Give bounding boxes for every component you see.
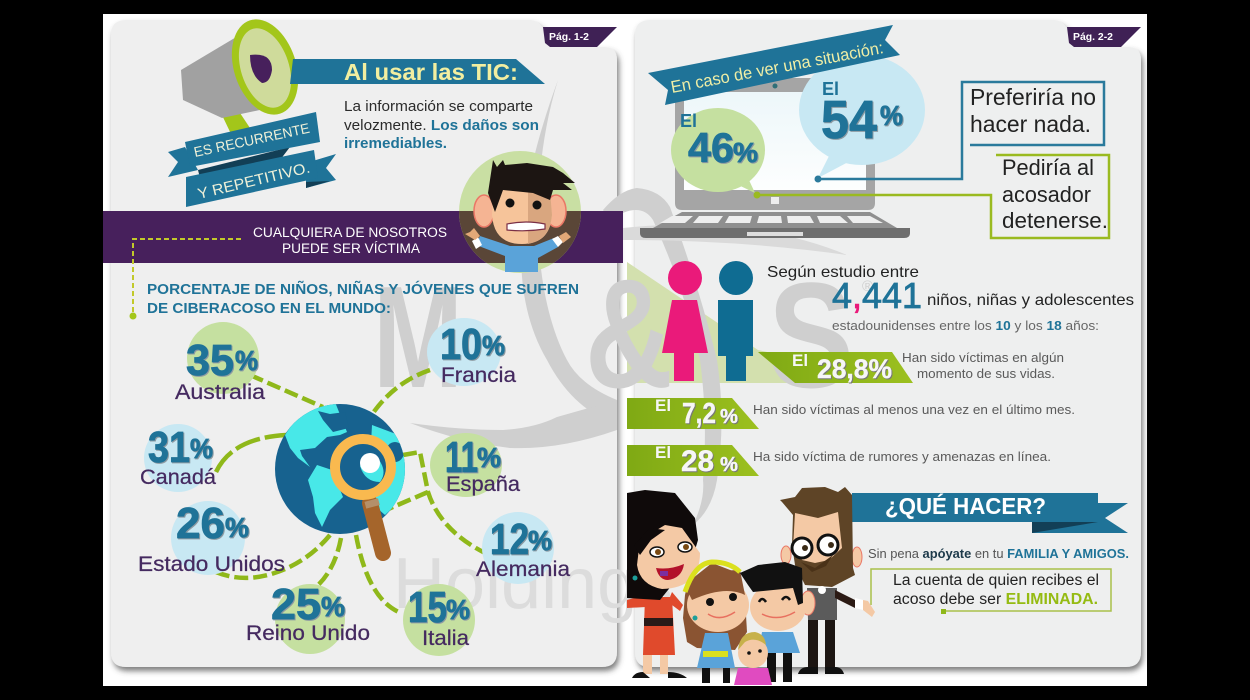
stat bar: 28,8%: Han sido víctimas en algún [902, 351, 1064, 365]
icon: girl figure [662, 261, 708, 381]
watermark: M&S Holdings: M [373, 256, 463, 418]
watermark: M&S Holdings: ® [862, 278, 873, 295]
stat bar: 28,8%: El [792, 351, 808, 370]
callout: ask the harasser to stop: detenerse. [1002, 208, 1108, 233]
watermark: M&S Holdings [373, 80, 873, 624]
speech bubble: 46%: El [680, 111, 697, 131]
stat bar: 28%: % [720, 454, 738, 476]
text block: information shared: irremediables. [344, 136, 447, 152]
stat bar: 7,2%: Han sido víctimas al menos una vez en el último mes. [753, 403, 1075, 417]
data point: Alemania 12% [476, 512, 570, 584]
watermark: M&S Holdings: Holdings [393, 544, 673, 624]
stat bar: 28,8%: momento de sus vidas. [917, 367, 1055, 381]
page tab: Pág. 2-2 [1067, 27, 1141, 47]
stat bar: 28,8%: 28,8% [817, 354, 892, 384]
illustration: man with glasses [780, 487, 875, 674]
text block: study of 4,441 children: 4,441 [832, 275, 922, 316]
callout: ask the harasser to stop: Pediría al [1002, 155, 1094, 180]
icon: globe with magnifier [275, 402, 412, 553]
callout: account must be deleted [871, 569, 1111, 614]
speech bubble: 54%: El [822, 79, 839, 99]
data point: Francia 10% [427, 318, 516, 387]
data point: Estados Unidos 26%: 26 [176, 499, 225, 548]
speech bubble: 54% [799, 55, 925, 178]
data point: Alemania 12%: Alemania [476, 558, 570, 581]
callout: account must be deleted: La cuenta de quien recibes el [893, 572, 1099, 589]
callout: prefer to do nothing: hacer nada. [970, 111, 1091, 137]
data point: Reino Unido 25%: 25 [271, 580, 321, 629]
ribbon: es recurrente y repetitivo [168, 112, 336, 207]
stat bar: 28%: El [655, 443, 671, 462]
data point: Estados Unidos 26%: Estado Unidos [138, 553, 285, 576]
data point: Francia 10%: 10 [440, 320, 482, 369]
page tab: Pág. 2-2: Pág. 2-2 [1073, 31, 1113, 43]
data point: España 11%: % [477, 442, 501, 473]
connector lines: countries to globe [216, 370, 485, 613]
illustration: boy in blue [740, 562, 815, 682]
data point: Australia 35%: 35 [186, 336, 234, 385]
ribbon: en caso de ver una situación: En caso de ver una situación: [669, 38, 885, 97]
callout: ask the harasser to stop: acosador [1002, 182, 1091, 207]
text block: information shared [344, 99, 539, 152]
data point: Estados Unidos 26%: % [225, 512, 249, 543]
data point: Italia 15% [403, 583, 475, 656]
data point: Reino Unido 25% [246, 580, 370, 654]
background shape: pale green wedge [627, 262, 912, 383]
data point: Alemania 12%: % [528, 525, 552, 556]
watermark: M&S Holdings: & [585, 247, 673, 420]
stat bar: 28%: 28 [681, 445, 714, 478]
text block: study of 4,441 children: Según estudio entre [767, 264, 919, 281]
stat bar: 7,2%: El [655, 396, 671, 415]
icon: megaphone [181, 11, 310, 136]
ribbon: qué hacer: ¿QUÉ HACER? [885, 492, 1046, 519]
page tab: Pág. 1-2 [543, 27, 617, 47]
data point: España 11%: España [446, 473, 520, 496]
data point: Canadá 31% [140, 423, 216, 492]
page tab: Pág. 1-2: Pág. 1-2 [549, 31, 589, 43]
icon: boy character [459, 151, 581, 273]
panel: right page background [635, 20, 1141, 667]
data point: Reino Unido 25%: % [321, 591, 345, 622]
data point: Alemania 12%: 12 [490, 515, 529, 564]
stat bar: 7,2% [627, 396, 1075, 430]
stat bar: 7,2%: 7,2 [682, 398, 716, 430]
ribbon: qué hacer [852, 492, 1128, 533]
text: seek family and friends: Sin pena apóyate en tu FAMILIA Y AMIGOS. [868, 547, 1129, 561]
icon: boy figure [718, 261, 753, 381]
watermark: M&S Holdings: S [768, 251, 854, 419]
data point: Canadá 31%: % [190, 433, 213, 464]
illustration: woman in red dress [627, 490, 700, 678]
banner: cualquiera de nosotros [103, 211, 623, 320]
data point: Estados Unidos 26% [138, 499, 285, 576]
data point: Italia 15%: 15 [408, 583, 447, 632]
icon: laptop [640, 78, 910, 238]
speech bubble: 46%: % [733, 137, 758, 168]
speech bubble: 54%: % [880, 100, 903, 131]
text block: study of 4,441 children [767, 264, 1134, 333]
data point: Francia 10%: % [482, 330, 505, 361]
data point: Reino Unido 25%: Reino Unido [246, 622, 370, 645]
banner: cualquiera de nosotros: CUALQUIERA DE NOSOTROS [253, 225, 447, 240]
text block: information shared: La información se comparte [344, 99, 533, 115]
panel: left page background [111, 20, 617, 667]
data point: Canadá 31%: 31 [148, 423, 190, 472]
data point: Francia 10%: Francia [441, 364, 516, 387]
ribbon: en caso de ver una situación [648, 25, 900, 105]
stat bar: 28% [627, 443, 1051, 478]
data point: España 11% [430, 433, 520, 497]
callout: ask the harasser to stop [754, 155, 1109, 238]
callout: prefer to do nothing: Preferiría no [970, 84, 1096, 110]
data point: Australia 35%: % [235, 345, 258, 376]
speech bubble: 54%: 54 [821, 90, 877, 150]
stat bar: 7,2%: % [720, 406, 738, 428]
data point: Australia 35% [175, 322, 265, 404]
data point: Italia 15%: Italia [422, 627, 469, 650]
banner: cualquiera de nosotros: PUEDE SER VÍCTIMA [282, 241, 420, 256]
callout: prefer to do nothing [814, 82, 1104, 182]
stat bar: 28,8% [758, 351, 1064, 384]
callout: account must be deleted: acoso debe ser ELIMINADA. [893, 591, 1098, 608]
text block: information shared: velozmente. Los daños son [344, 118, 539, 134]
illustration: baby [734, 632, 772, 685]
text block: study of 4,441 children: estadounidenses entre los 10 y los 18 años: [832, 318, 1099, 333]
data point: Canadá 31%: Canadá [140, 466, 216, 489]
speech bubble: 46% [671, 108, 765, 193]
stat bar: 28%: Ha sido víctima de rumores y amenazas en línea. [753, 450, 1051, 464]
data point: Italia 15%: % [446, 594, 470, 625]
data point: Australia 35%: Australia [175, 381, 265, 404]
illustration: girl with headband [683, 562, 749, 683]
heading: percentage of children [147, 280, 579, 317]
text block: study of 4,441 children: niños, niñas y adolescentes [927, 292, 1134, 309]
title ribbon: Al usar las TIC [290, 59, 545, 85]
heading: percentage of children: DE CIBERACOSO EN EL MUNDO: [147, 301, 391, 317]
ribbon: es recurrente y repetitivo: ES RECURRENTE [192, 120, 311, 160]
title ribbon: Al usar las TIC: Al usar las TIC: [344, 59, 518, 85]
ribbon: es recurrente y repetitivo: Y REPETITIVO. [196, 160, 312, 203]
heading: percentage of children: PORCENTAJE DE NIÑOS, NIÑAS Y JÓVENES QUE SUFREN [147, 280, 579, 298]
speech bubble: 46%: 46 [688, 124, 734, 171]
data point: España 11%: 11 [445, 433, 478, 482]
